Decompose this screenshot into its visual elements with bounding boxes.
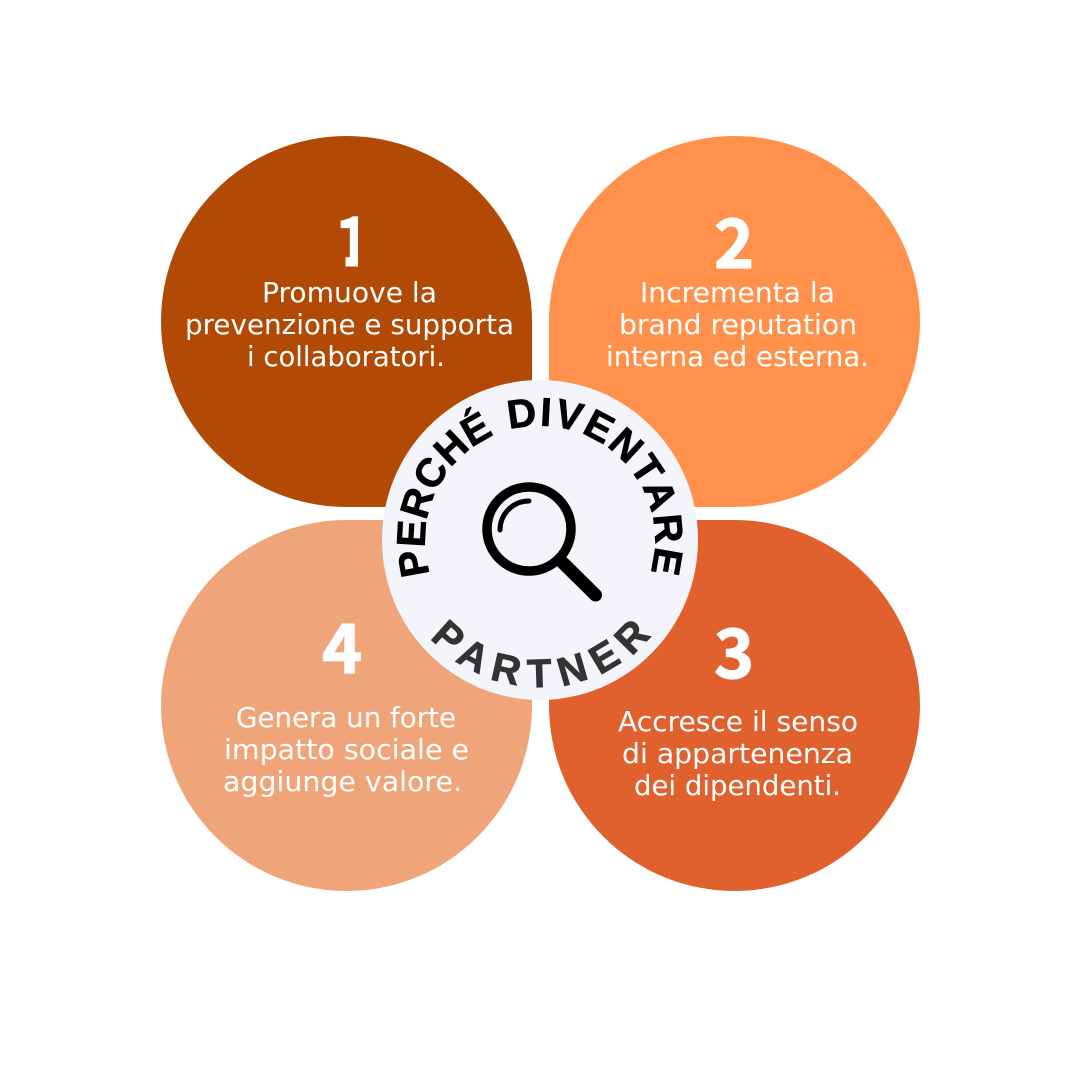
text: benefit 4 <box>223 702 469 798</box>
text: benefit 4: aggiunge valore. <box>223 766 462 798</box>
text: benefit 3: Accresce il senso <box>618 706 858 738</box>
text: benefit 2 <box>606 277 869 373</box>
icon: magnifying glass <box>487 487 596 595</box>
panel: benefit 1 <box>161 136 532 507</box>
text: benefit 2: brand reputation <box>619 309 857 341</box>
text: benefit 4: Genera un forte <box>236 702 456 734</box>
panel: benefit 2 <box>549 136 920 507</box>
text: benefit 3: dei dipendenti. <box>634 770 841 802</box>
text: benefit 1: prevenzione e supporta <box>185 309 514 341</box>
curved heading: top: PERCHÉ DIVENTARE <box>396 398 683 577</box>
number 1: 1 <box>334 187 374 286</box>
panel: benefit 4 <box>161 520 532 891</box>
text: benefit 1: Promuove la <box>262 277 437 309</box>
panel: benefit 3 <box>549 520 920 891</box>
central badge <box>382 380 698 700</box>
number 3: 3 <box>714 599 754 698</box>
text: benefit 3 <box>618 706 858 802</box>
text: benefit 2: Incrementa la <box>640 277 835 309</box>
number 2: 2 <box>714 189 754 288</box>
curved heading: bottom: PARTNER <box>430 619 652 688</box>
number 4: 4 <box>322 594 362 693</box>
text: benefit 3: di appartenenza <box>622 738 853 770</box>
text: benefit 2: interna ed esterna. <box>606 341 869 373</box>
text: benefit 1 <box>185 277 514 373</box>
text: benefit 4: impatto sociale e <box>224 734 469 766</box>
text: benefit 1: i collaboratori. <box>247 341 445 373</box>
